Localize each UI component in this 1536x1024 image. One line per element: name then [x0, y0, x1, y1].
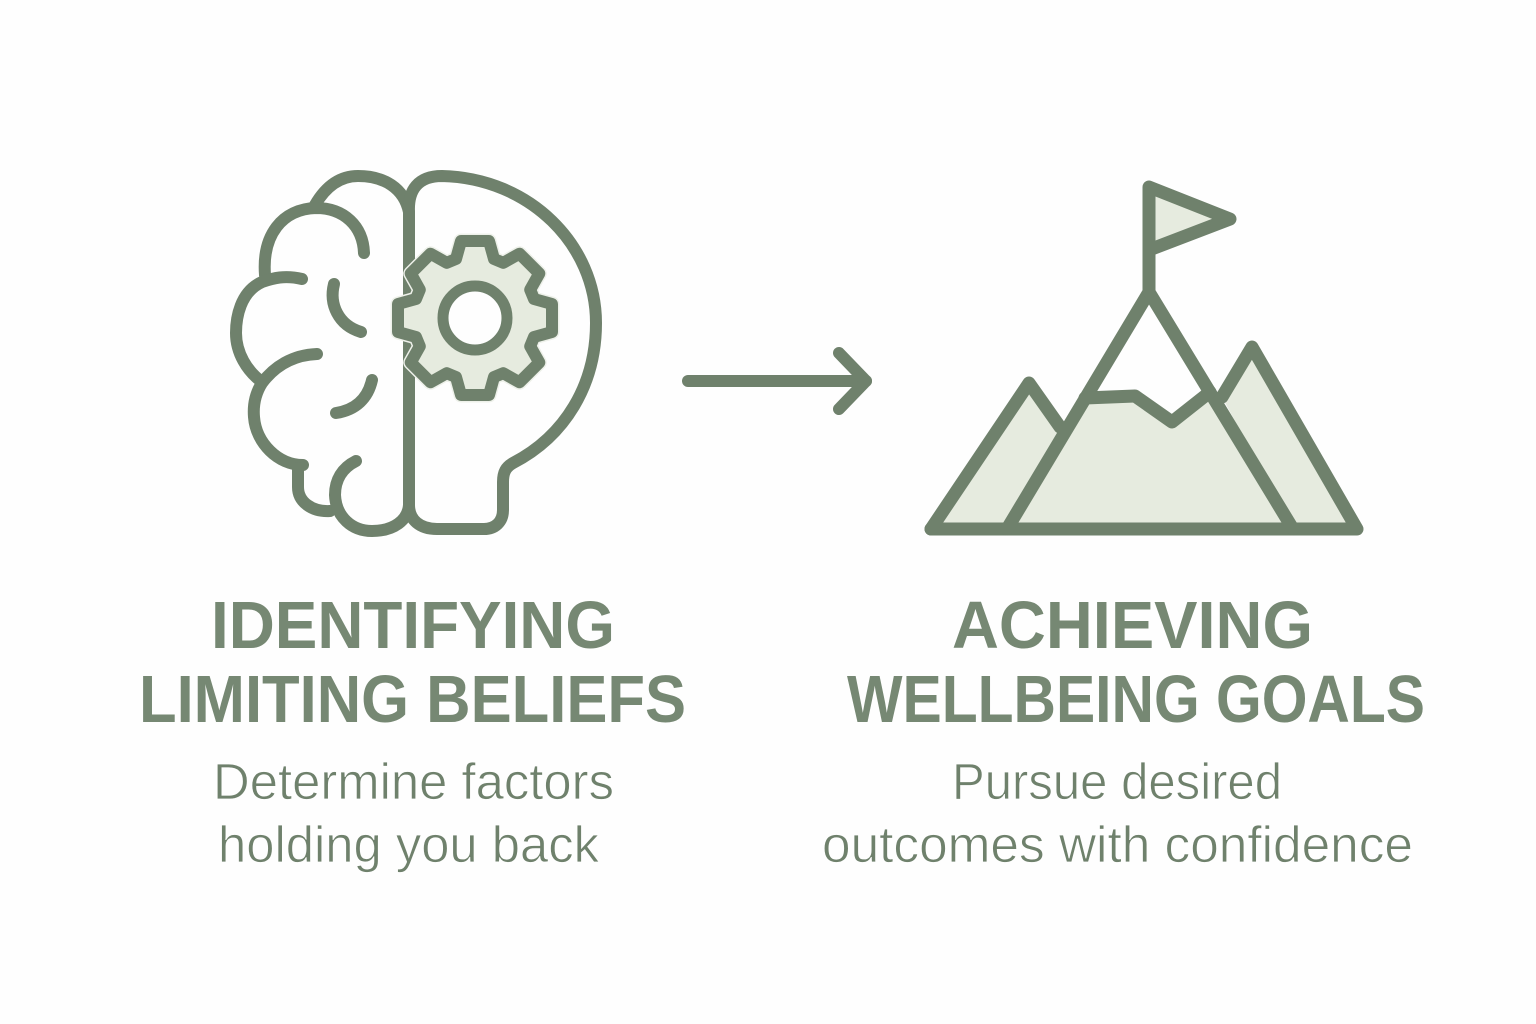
panel: achieving wellbeing goals	[822, 187, 1425, 873]
panel: identifying limiting beliefs	[139, 176, 686, 873]
icon: mountain with flag	[931, 187, 1357, 529]
mountain and flag outlines	[931, 187, 1357, 529]
description: pursue desired outcomes	[822, 753, 1413, 873]
head right outline and midline	[409, 176, 596, 529]
arrow	[688, 353, 866, 409]
mountain fills	[931, 187, 1357, 529]
description: pursue desired outcomes: outcomes with confidence	[822, 816, 1413, 873]
heading: identifying limiting beliefs	[139, 588, 686, 737]
description: determine factors: Determine factors	[213, 753, 614, 810]
description: pursue desired outcomes: Pursue desired	[952, 753, 1282, 810]
icon: gear	[398, 241, 552, 395]
heading: identifying limiting beliefs: LIMITING BELIEFS	[139, 662, 686, 737]
heading: achieving wellbeing goals: WELLBEING GOALS	[847, 662, 1425, 737]
heading: identifying limiting beliefs: IDENTIFYING	[211, 588, 615, 663]
brain left hemisphere	[236, 176, 409, 531]
icon: brain and head with gear	[236, 176, 596, 531]
description: determine factors	[213, 753, 614, 873]
heading: achieving wellbeing goals	[847, 588, 1425, 737]
description: determine factors: holding you back	[218, 816, 599, 873]
heading: achieving wellbeing goals: ACHIEVING	[952, 588, 1313, 663]
